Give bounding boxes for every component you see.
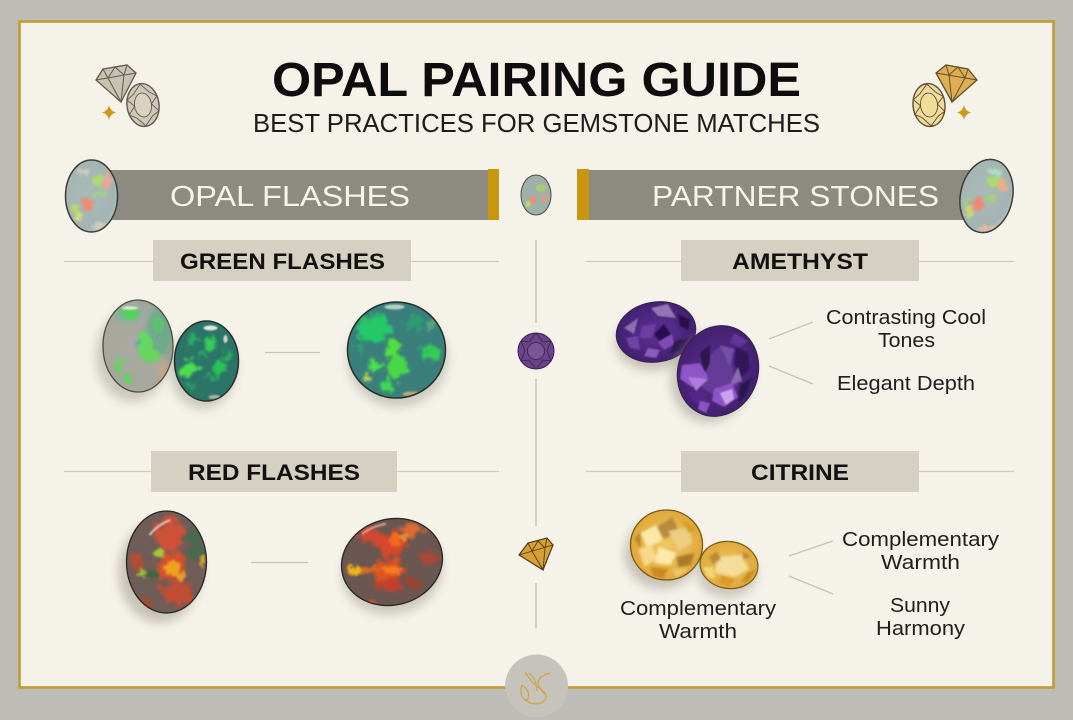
label: complementary warmth right <box>842 529 999 574</box>
label: complementary warmth left <box>620 598 776 643</box>
heading: red flashes <box>64 451 499 492</box>
icon: center small opal <box>521 175 551 215</box>
icon: left gem cluster <box>96 65 162 129</box>
heading: citrine: CITRINE <box>751 460 849 485</box>
icon: gold sparkle <box>102 105 116 120</box>
icon: amethyst small <box>611 301 699 376</box>
icon: right gem cluster <box>911 65 977 128</box>
icon: gold sparkle <box>957 105 971 120</box>
icon: red opal oval <box>118 511 206 623</box>
icon: green opal dark <box>170 321 238 409</box>
label: complementary warmth left: Warmth <box>659 621 737 643</box>
icon: banner opal left <box>66 160 118 232</box>
label: complementary warmth left: Complementary <box>620 598 776 620</box>
icon: center amethyst round <box>518 333 554 369</box>
icon: citrine large <box>624 510 702 589</box>
heading: opal flashes: OPAL FLASHES <box>170 181 410 213</box>
label: contrasting cool tones <box>826 307 986 352</box>
label: sunny harmony: Sunny <box>890 595 950 617</box>
center divider line <box>535 240 537 628</box>
icon: green opal round <box>348 302 448 407</box>
panel: opal flashes banner <box>110 169 499 220</box>
leader lines: amethyst <box>769 322 813 384</box>
leader lines: citrine <box>789 541 833 594</box>
icon: pale gold oval gem <box>911 82 947 128</box>
icon: amethyst large <box>666 325 760 427</box>
title: OPAL PAIRING GUIDE <box>272 54 801 107</box>
panel: partner stones banner <box>577 169 969 220</box>
icon: grey diamond <box>96 65 136 102</box>
heading: partner stones: PARTNER STONES <box>652 181 939 213</box>
connector: red opal <box>251 562 308 564</box>
label: sunny harmony <box>876 595 965 640</box>
connector: green opal <box>265 352 320 354</box>
icon: red opal wide <box>338 518 447 619</box>
icon: center citrine diamond <box>519 538 553 570</box>
heading: green flashes: GREEN FLASHES <box>180 249 385 274</box>
label: complementary warmth right: Warmth <box>881 552 960 574</box>
heading: citrine <box>586 451 1014 492</box>
label: contrasting cool tones: Contrasting Cool <box>826 307 986 329</box>
heading: amethyst: AMETHYST <box>732 249 869 274</box>
icon: logo badge <box>505 654 568 718</box>
icon: banner opal right <box>959 158 1014 234</box>
subtitle: BEST PRACTICES FOR GEMSTONE MATCHES <box>253 108 820 138</box>
label: complementary warmth right: Complementary <box>842 529 999 551</box>
icon: grey oval gem <box>124 81 162 129</box>
heading: green flashes <box>64 240 499 281</box>
icon: green opal pale <box>96 300 174 402</box>
heading: red flashes: RED FLASHES <box>188 460 360 485</box>
label: elegant depth: Elegant Depth <box>837 373 975 395</box>
heading: amethyst <box>586 240 1014 281</box>
label: sunny harmony: Harmony <box>876 618 965 640</box>
icon: citrine small <box>697 538 761 598</box>
icon: gold diamond <box>936 65 977 102</box>
label: contrasting cool tones: Tones <box>878 330 935 352</box>
